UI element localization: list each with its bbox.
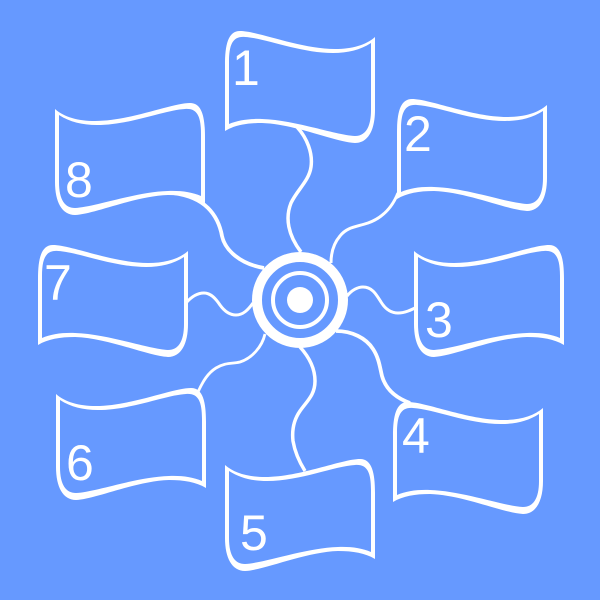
connector: flag 7 to hub	[186, 293, 253, 315]
flag 8	[55, 103, 205, 215]
flag 1: 1	[232, 40, 260, 96]
flag 5	[225, 459, 375, 571]
connector: flag 5 to hub	[293, 347, 315, 471]
central hub icon	[257, 257, 343, 343]
connector: flag 2 to hub	[331, 193, 398, 263]
flag 4: 4	[402, 408, 430, 464]
connector: flag 6 to hub	[198, 334, 265, 392]
flag 2	[397, 99, 547, 211]
flag 4	[393, 402, 543, 514]
flag 8: 8	[65, 152, 93, 208]
flag 6	[56, 388, 206, 500]
connector: flag 8 to hub	[173, 193, 264, 268]
flag 5: 5	[240, 505, 268, 561]
flag 2: 2	[404, 106, 432, 162]
connector: flag 4 to hub	[336, 331, 410, 403]
flag 6: 6	[66, 435, 94, 491]
flag 7	[38, 245, 188, 357]
connector: flag 3 to hub	[347, 287, 417, 313]
flag 1	[225, 31, 375, 143]
connector: flag 1 to hub	[288, 127, 311, 252]
flag 3	[414, 245, 564, 357]
flag 3: 3	[425, 292, 453, 348]
flag 7: 7	[44, 255, 72, 311]
